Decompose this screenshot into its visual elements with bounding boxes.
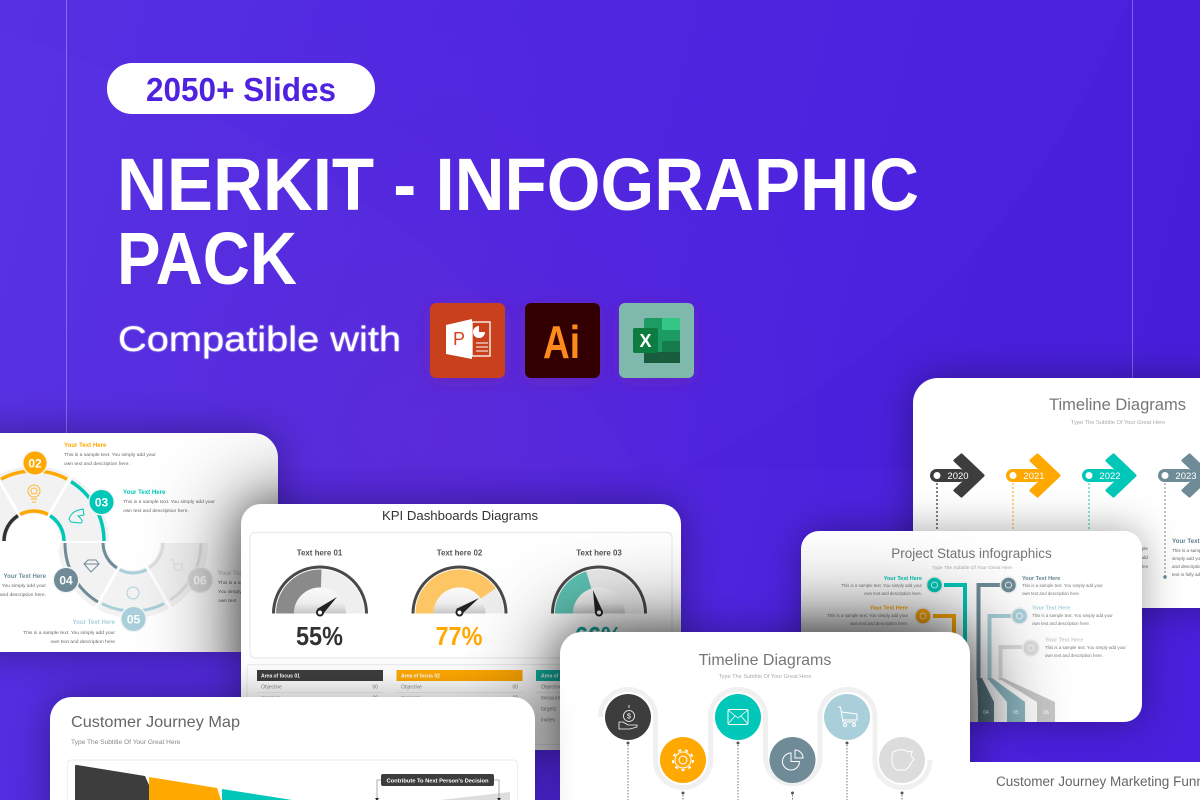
gauge 01: 55% (296, 621, 343, 651)
table: area of focus 02: 00 (512, 684, 518, 690)
arrow 2021 (1006, 455, 1059, 531)
table: area of focus 01: measure (261, 696, 281, 702)
text block 2022: simply add (1126, 555, 1148, 560)
step marker 04: 04 (59, 574, 73, 588)
left text blocks: This is a sample text. You simply add your (841, 583, 923, 588)
table: area of focus 01: 00 (372, 696, 378, 702)
table: area of focus 01: 00 (372, 684, 378, 690)
icon: diamond (84, 560, 99, 572)
connector lines (933, 585, 1022, 680)
step marker 02 (22, 450, 48, 476)
text block 05: This is a sample text. You simply add your (23, 630, 115, 636)
right text blocks: This is a sample text. You simply add your (1045, 645, 1126, 650)
right text blocks (1022, 576, 1126, 658)
table: area of focus 02: measure (401, 696, 421, 702)
circle: pie chart (770, 737, 816, 783)
text block 04: You simply add your (2, 583, 46, 589)
left text blocks: own text and description here. (850, 621, 908, 626)
panel: customer journey map: Customer Journey Map (71, 714, 240, 731)
text block 2022: This is a sample (1115, 546, 1148, 551)
left text blocks: Your Text Here (870, 606, 908, 612)
funnel segment teal (222, 789, 292, 800)
gauge 02: 77% (436, 621, 482, 651)
subtitle: compatible with: Compatible with (118, 320, 401, 359)
panel: circular process diagram (0, 409, 302, 676)
table: area of focus 02 (396, 670, 522, 698)
step marker 05: 05 (127, 612, 140, 626)
funnel segment dark (75, 765, 149, 800)
pill badge: 2050+ Slides: 2050+ Slides (146, 71, 336, 108)
left text blocks: This is a sample text. You simply add your (827, 613, 909, 618)
right text blocks: own text and description here. (1045, 653, 1103, 658)
text block 05: own text and description here (50, 639, 115, 645)
step marker 03 (88, 488, 115, 516)
table: area of focus 03 (536, 670, 560, 722)
table: area of focus 01: Objective (261, 684, 282, 690)
icon: Illustrator (525, 303, 600, 378)
table: area of focus 02: Area of focus 02 (401, 674, 440, 680)
icon: Excel: X (639, 331, 652, 351)
ribbon labels: 05 (1013, 710, 1019, 716)
text block 2022 (1142, 546, 1148, 568)
panel: customer journey map (50, 697, 535, 800)
text block 05: Your Text Here (73, 619, 116, 626)
dotted stems (628, 745, 902, 800)
text block 2023 (1172, 538, 1200, 577)
text block 03: This is a sample text. You simply add your (123, 499, 215, 505)
title: NERKIT - INFOGRAPHIC (117, 143, 919, 226)
text block 04 (0, 573, 47, 598)
step marker 03: 03 (95, 496, 108, 510)
gauge 03: 66% (575, 621, 622, 651)
text block 02: Your Text Here (64, 442, 107, 449)
circle: money hand (605, 694, 651, 740)
text block 02: This is a sample text. You simply add your (64, 452, 156, 458)
text block 2022: text files (1131, 564, 1149, 569)
left text blocks (827, 576, 923, 626)
gauge 03 (551, 550, 647, 633)
arrow 2023: 2023 (1175, 471, 1197, 482)
gauge 03: Text here 03 (576, 548, 622, 558)
arrow 2022 (1082, 455, 1135, 531)
panel: timeline circles: Type The Subtitle Of Your Great Here (719, 674, 811, 680)
arrow 2022: 2022 (1099, 471, 1121, 482)
panel: timeline arrows: Type The Subtitle Of Your Great Here (1071, 420, 1165, 426)
text block 04: Your Text Here (4, 573, 47, 580)
panel: timeline arrows: Timeline Diagrams (1049, 396, 1186, 414)
gauge 01 (274, 548, 366, 651)
right text blocks: This is a sample text. You simply add your (1032, 613, 1113, 618)
arrow 2021: 2021 (1023, 471, 1045, 482)
right text blocks: Your Text Here (1032, 606, 1070, 612)
table: area of focus 03: measure (541, 696, 561, 702)
text block 03: Your Text Here (123, 489, 166, 496)
text block 06: This is a sample text. (218, 580, 264, 586)
panel: KPI dashboards: KPI Dashboards Diagrams (382, 508, 538, 523)
table: area of focus 03: Area of focus 03 (541, 674, 580, 680)
panel: project status: Project Status infographics (891, 546, 1052, 561)
panel: timeline arrows (913, 378, 1200, 608)
panel: KPI dashboards (217, 480, 705, 773)
circle: piggy bank (879, 737, 925, 783)
gauge 01: Text here 01 (297, 548, 343, 558)
icon: PowerPoint: P (453, 329, 465, 349)
icon: PowerPoint (430, 303, 505, 378)
gauge 02: Text here 02 (437, 548, 483, 558)
circle: gear (660, 737, 706, 783)
text block 04: and description here. (0, 592, 46, 598)
right text blocks: Your Text Here (1022, 576, 1060, 582)
text block 03 (123, 489, 215, 514)
node icons (915, 577, 1039, 656)
text block 02: own text and description here. (64, 461, 130, 467)
arrow 2020 (930, 455, 983, 531)
circle: money hand: $ (627, 714, 631, 720)
ribbon labels (977, 678, 1055, 722)
icon: muscle arm (69, 509, 84, 523)
panel: customer journey map: Type The Subtitle Of Your Great Here (71, 739, 181, 746)
icon: pie chart (127, 587, 139, 599)
step marker 02: 02 (28, 456, 42, 470)
table: area of focus 02: 00 (512, 696, 518, 702)
title: PACK (117, 217, 297, 300)
table: area of focus 03: targets (541, 706, 557, 712)
panel: timeline circles (560, 632, 970, 800)
step marker 04 (52, 566, 80, 594)
step marker 06: 06 (193, 574, 207, 588)
table: area of focus 03: Objective (541, 684, 562, 690)
pill badge: 2050+ Slides (107, 63, 375, 114)
panel: project status: Type The Subtitle Of Your Great Here (932, 565, 1012, 571)
text block 06: You simply add your (218, 589, 263, 595)
text block 06: Your Text Here (218, 570, 261, 577)
stem dots (626, 742, 904, 794)
gauge 02 (413, 548, 506, 651)
circle: envelope (715, 694, 761, 740)
funnel segment grey (440, 792, 510, 800)
table: area of focus 01: Area of focus 01 (261, 674, 300, 680)
arrow 2020: 2020 (947, 471, 969, 482)
funnel segment orange (149, 777, 221, 800)
text block 06 (218, 570, 241, 602)
panel: project status (777, 506, 1168, 746)
step marker 06 (186, 566, 214, 594)
table: area of focus 03: invites (541, 718, 556, 724)
step marker 05 (120, 606, 147, 632)
title (117, 143, 919, 300)
table: area of focus 02: Objective (401, 684, 422, 690)
table: area of focus 01 (257, 670, 383, 697)
text block 02 (64, 442, 156, 467)
circle: shopping cart (824, 694, 870, 740)
icon: Illustrator: Ai (543, 316, 580, 368)
panel: timeline circles: Timeline Diagrams (699, 652, 831, 669)
arrow 2023 (1158, 455, 1200, 579)
callout (375, 774, 501, 800)
left text blocks: own text and description here. (864, 591, 922, 596)
left text blocks: Your Text Here (884, 576, 922, 582)
icon: lightbulb (28, 485, 40, 502)
right text blocks: own text and description here. (1032, 621, 1090, 626)
ribbon labels: 06 (1043, 710, 1049, 716)
right text blocks: This is a sample text. You simply add your (1022, 583, 1103, 588)
text block 03: own text and description here. (123, 508, 189, 514)
text block 06: own text (218, 598, 237, 604)
icon: Excel (619, 303, 694, 378)
right text blocks: own text and description here. (1022, 591, 1080, 596)
ribbon labels: 04 (983, 710, 989, 716)
icon: cart (170, 560, 182, 570)
text block 05 (23, 619, 116, 645)
right text blocks: Your Text Here (1045, 638, 1083, 644)
panel: journey marketing funnel (970, 762, 1200, 800)
callout: Contribute To Next Person's Decision (386, 778, 489, 784)
